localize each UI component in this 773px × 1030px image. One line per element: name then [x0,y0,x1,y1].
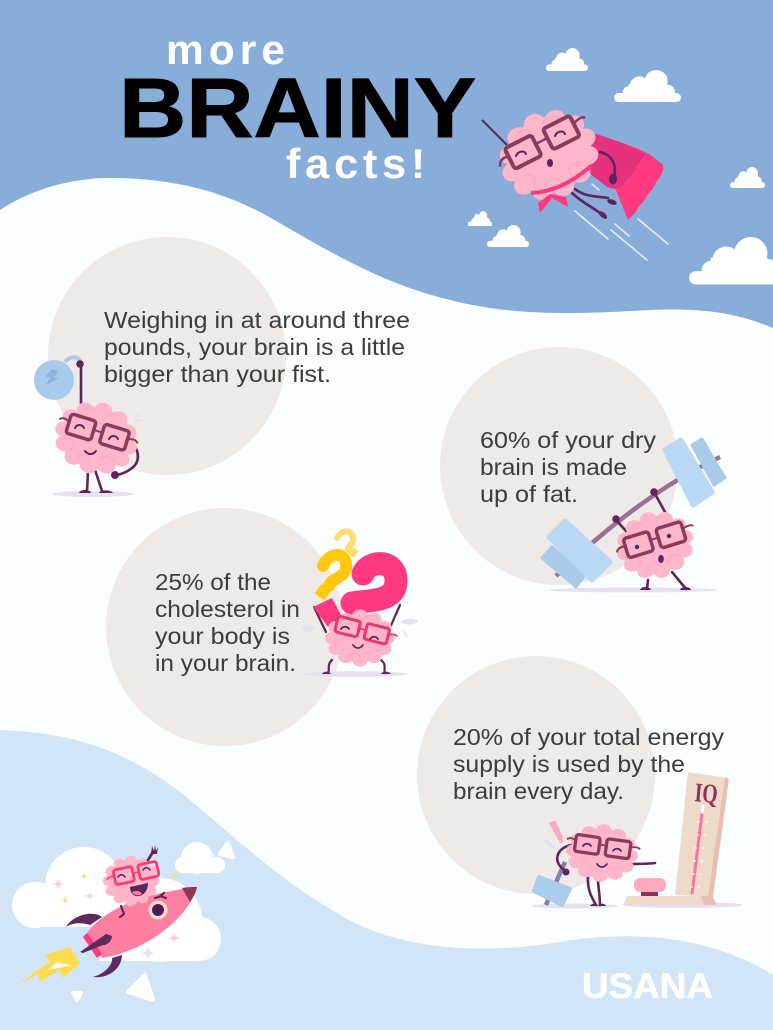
illustration: brain lifting barbell [542,439,725,592]
illustration: brain riding rocket [21,845,197,985]
IQ tower [623,772,729,905]
fact text two: up of fat. [480,481,578,507]
barbell [542,439,725,587]
fact text four: 20% of your total energy [453,724,725,750]
legs [572,189,608,215]
big pink question mark [313,564,396,627]
neck scarf [531,166,591,213]
title: more [166,26,290,73]
flame [21,947,80,985]
illustration: brain holding question mark [302,531,417,677]
fact text one: Weighing in at around three [104,307,410,333]
bottom light blue wave background [0,730,773,1030]
button [634,878,666,896]
fact text one [104,307,410,387]
rocket nose [182,887,197,902]
fins [66,914,122,977]
fact text three: 25% of the [155,569,271,595]
fact text one: pounds, your brain is a little [104,334,405,360]
fact text four: supply is used by the [453,751,685,777]
cape [585,132,663,220]
panel: fact circle three [106,508,344,746]
USANA logo: USANA [582,967,713,1006]
fact text two: 60% of your dry [480,427,657,453]
speed lines [575,184,668,260]
title: facts! [286,140,430,187]
brain [485,94,613,216]
panel: fact circle four [417,656,655,894]
top blue wave background [0,0,773,328]
IQ tower: IQ [693,777,719,809]
fact text four: brain every day. [453,778,624,804]
illustration: brain with kettlebell [34,357,146,497]
illustration: brain with hammer and IQ strength tester [532,772,743,908]
fact text three [155,569,300,676]
fact text three: cholesterol in [155,596,300,622]
fact text four [453,724,725,804]
hero: flying superhero brain [482,94,668,260]
title: BRAINY [119,61,476,155]
laughing mouth [130,883,148,896]
fact text three: in your brain. [155,650,296,676]
antenna arm [482,120,507,145]
rocket body [87,887,197,958]
panel: fact circle two [440,347,678,585]
panel: fact circle one [48,237,286,475]
kettlebell [34,357,81,400]
title [119,26,476,187]
cape arm [600,152,615,178]
glasses [494,110,592,175]
fact text one: bigger than your fist. [104,361,331,387]
exclamation mark [545,822,563,848]
fact text two [480,427,657,507]
yellow question marks [315,531,359,600]
fact text two: brain is made [480,454,627,480]
face [516,132,565,156]
sky clouds [468,48,773,284]
rocket window [148,900,168,920]
rocket base [83,933,102,958]
fact text three: your body is [155,623,290,649]
hammer [534,862,570,905]
illustration: clouds behind rocket [12,842,233,1000]
icon: sparkles [53,872,179,959]
